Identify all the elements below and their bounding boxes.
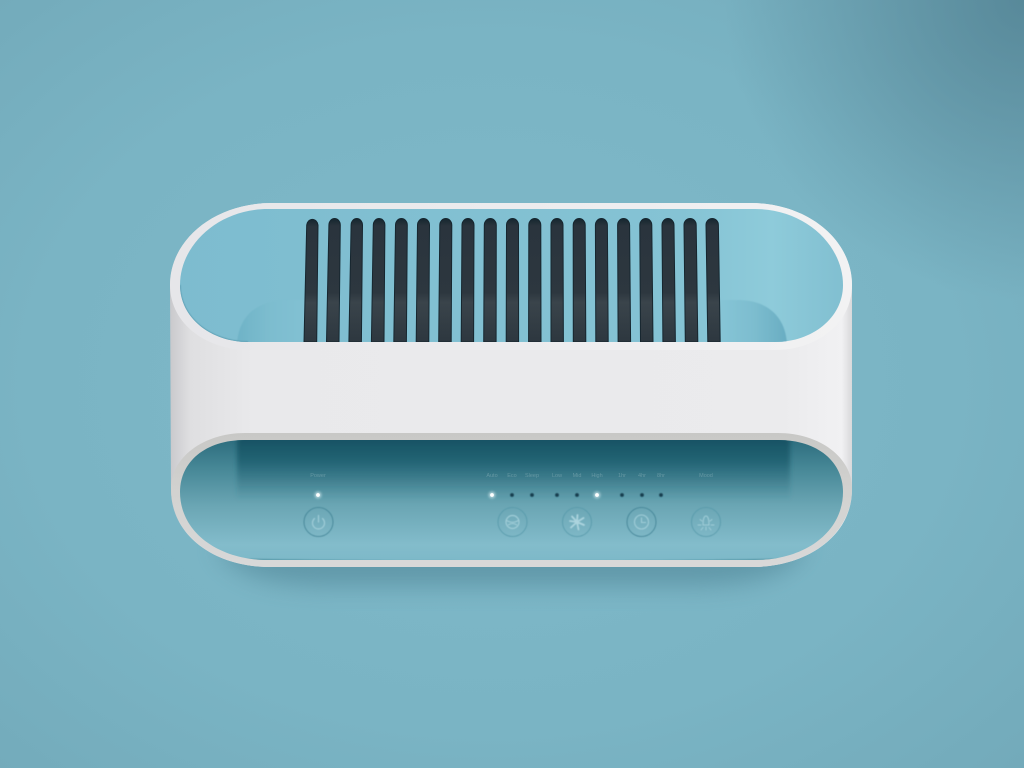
top opening — [170, 205, 854, 345]
device shadow — [215, 545, 809, 586]
right inner bump — [732, 300, 787, 342]
label: Eco: Eco — [507, 473, 517, 479]
label: High: High — [591, 473, 603, 479]
indicator lights — [315, 492, 663, 498]
intake grille slots — [304, 218, 720, 342]
button: power — [304, 508, 333, 536]
opening inner edge — [180, 285, 248, 342]
label: Mood: Mood — [699, 473, 713, 479]
lower rim — [171, 433, 852, 567]
label: 8hr: 8hr — [657, 473, 665, 479]
label: Sleep: Sleep — [525, 473, 539, 479]
label: Mid: Mid — [573, 473, 581, 479]
lower opening — [180, 440, 843, 560]
left inner bump — [237, 310, 255, 342]
white housing — [170, 203, 852, 567]
purifier body — [170, 203, 852, 567]
button: timer — [627, 508, 656, 536]
label: Power: Power — [310, 473, 326, 479]
button: mode — [498, 508, 527, 536]
inner shadow band — [235, 440, 792, 492]
label: 4hr: 4hr — [638, 473, 646, 479]
top rim — [170, 203, 852, 350]
label: 1hr: 1hr — [618, 473, 626, 479]
button: fan speed — [562, 508, 592, 536]
label: Low: Low — [552, 473, 562, 479]
button: mood light — [692, 508, 720, 536]
label: Auto: Auto — [486, 473, 498, 479]
